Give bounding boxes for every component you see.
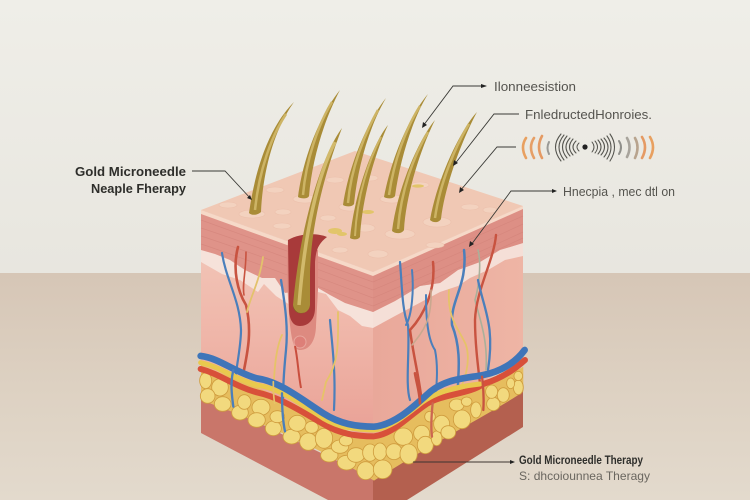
background wall xyxy=(0,0,750,273)
needle 6 xyxy=(392,120,435,233)
subcutaneous base right face xyxy=(373,390,523,500)
yellow nerve band xyxy=(201,363,480,430)
hair follicle with microneedle entry xyxy=(287,234,327,388)
blood vessels dermis right xyxy=(400,235,496,435)
skin surface top face xyxy=(201,151,523,272)
label 1 text: Ilonneesistion xyxy=(494,79,576,94)
dermis right face xyxy=(373,240,523,440)
needle 5 xyxy=(350,125,388,239)
leader arrow 2 xyxy=(454,114,519,165)
fat backdrop xyxy=(201,365,523,481)
vessels crossing fat xyxy=(232,370,484,437)
follicle lower root xyxy=(295,346,301,388)
epidermis wavy strata lines xyxy=(201,216,523,306)
surface lighter front edge xyxy=(201,206,523,276)
blood vessels dermis left xyxy=(222,247,338,430)
bottom label subtitle: S: dhcoiounnea Theragy xyxy=(519,469,650,483)
bottom label title: Gold Microneedle Therapy xyxy=(519,453,643,467)
fat layer xyxy=(200,350,525,481)
needle 8 long front needle xyxy=(293,128,342,313)
needle 1 xyxy=(249,102,294,215)
callout: left label: Neaple Fherapy xyxy=(91,181,187,196)
needle 7 xyxy=(430,112,477,222)
skin cross-section block xyxy=(201,151,523,500)
callout: top right label 1 xyxy=(422,79,576,128)
red artery band xyxy=(201,360,525,436)
callout: bottom label xyxy=(413,453,650,483)
callout: top right label 2 xyxy=(453,107,652,166)
epidermis band right xyxy=(373,206,523,312)
leader arrow 3 xyxy=(471,191,556,245)
blue vein band xyxy=(201,350,525,427)
label 2 text: FnledructedHonroies. xyxy=(525,107,652,122)
background floor xyxy=(0,273,750,500)
needle 2 xyxy=(298,90,340,198)
callout: wave label leader xyxy=(459,147,516,193)
pale wavy layer right xyxy=(373,243,523,328)
callout: right middle label xyxy=(469,184,675,247)
needle 4 xyxy=(384,94,428,198)
gold microneedles xyxy=(249,90,477,313)
dermis left face xyxy=(201,240,373,440)
left leader arrow xyxy=(192,171,251,199)
epidermis band left xyxy=(201,210,373,312)
fat cells xyxy=(200,371,523,480)
follicle pink sheath xyxy=(287,240,318,350)
needle 3 xyxy=(343,98,386,206)
label 3 text: Hnecpia , mec dtl on xyxy=(563,184,675,199)
leader arrow bottom xyxy=(413,461,512,463)
main vessel bands xyxy=(201,350,525,436)
leader arrow 1 xyxy=(423,86,486,126)
surface pores and cells xyxy=(219,175,497,258)
follicle bulb xyxy=(294,336,306,348)
subcutaneous base left face xyxy=(201,395,373,500)
icon: ultrasound waves xyxy=(523,134,653,161)
callout: left label xyxy=(75,164,252,200)
left label text: Gold Microneedle xyxy=(75,164,186,179)
pale wavy layer left xyxy=(201,248,373,338)
gold flecks on surface xyxy=(328,184,424,236)
follicle funnel xyxy=(288,234,327,326)
